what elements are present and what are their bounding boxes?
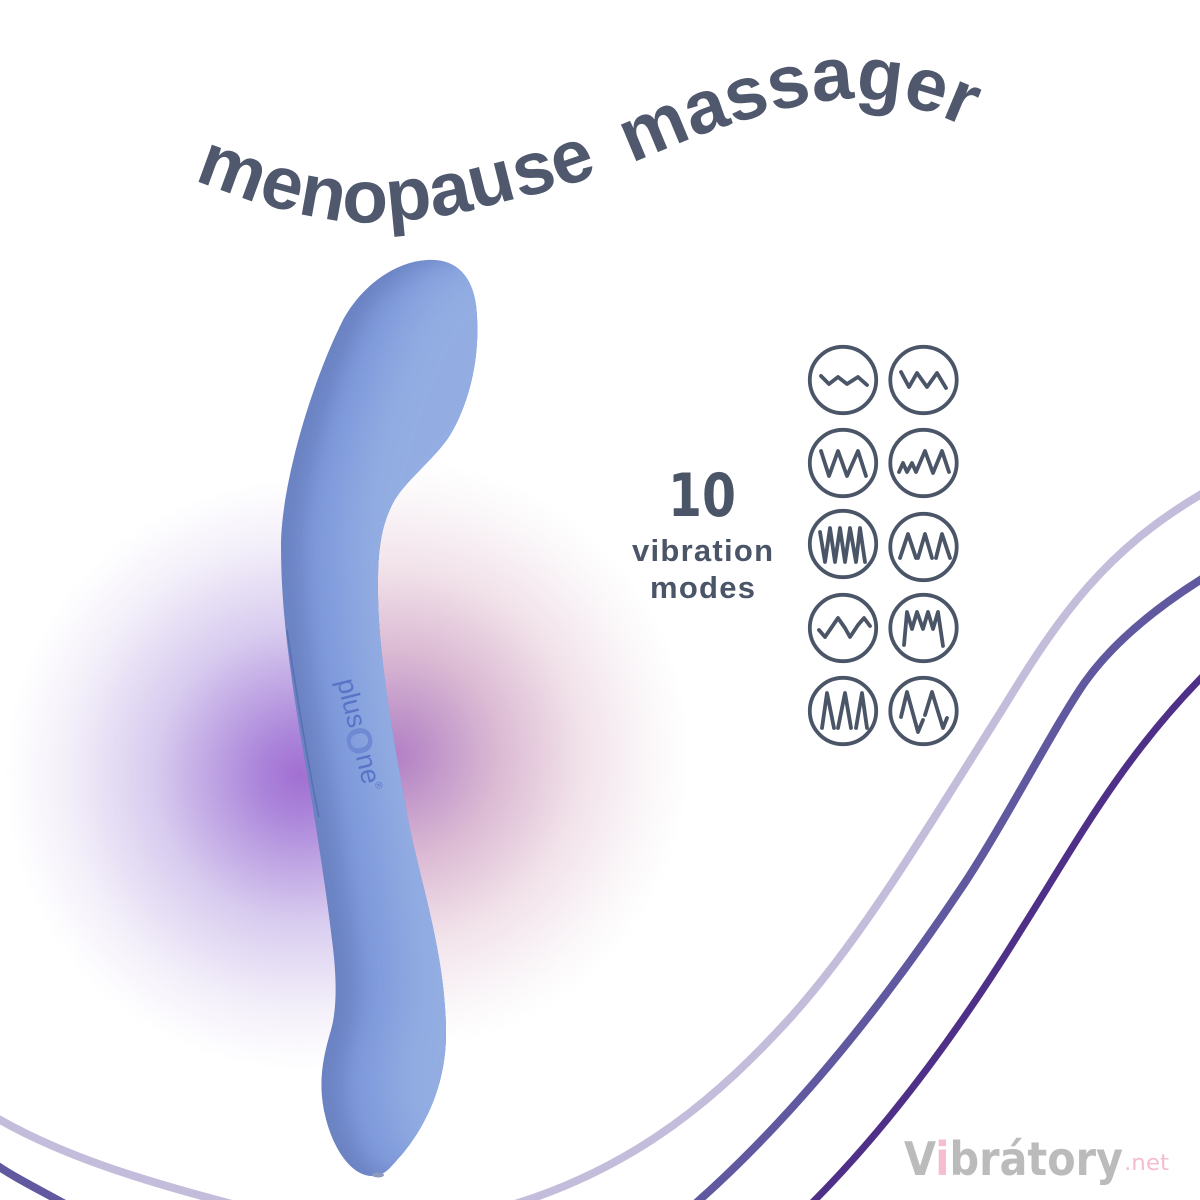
mode icon 5: [810, 511, 876, 577]
ten vibration modes label: [632, 461, 773, 605]
mode icon 2: [890, 347, 957, 413]
vibration mode icons: [810, 347, 957, 744]
decorative wave lines: [0, 492, 1200, 1200]
mode icon 3: [810, 430, 876, 496]
mode icon 1: [810, 347, 876, 413]
ten vibration modes label: modes: [650, 570, 755, 605]
watermark: Vibratory.net: .net: [1124, 1151, 1169, 1176]
ten vibration modes label: vibration: [632, 533, 773, 568]
mode icon 4: [890, 430, 957, 496]
mode icon 10: [890, 678, 957, 744]
product logo: plus: [331, 675, 372, 731]
title: menopause massager: [198, 60, 982, 237]
mode icon 8: [890, 595, 957, 661]
product: massager: [281, 260, 478, 1178]
mode icon 7: [810, 595, 876, 661]
mode icon 9: [810, 678, 876, 744]
product logo: ®: [372, 781, 384, 791]
product logo: O: [336, 722, 383, 759]
watermark: Vibratory.net: Vibrátory: [904, 1132, 1123, 1186]
mode icon 6: [890, 514, 957, 580]
glow behind product: [37, 499, 650, 1038]
ten vibration modes label: 10: [668, 461, 736, 531]
product logo: ne: [350, 750, 386, 787]
